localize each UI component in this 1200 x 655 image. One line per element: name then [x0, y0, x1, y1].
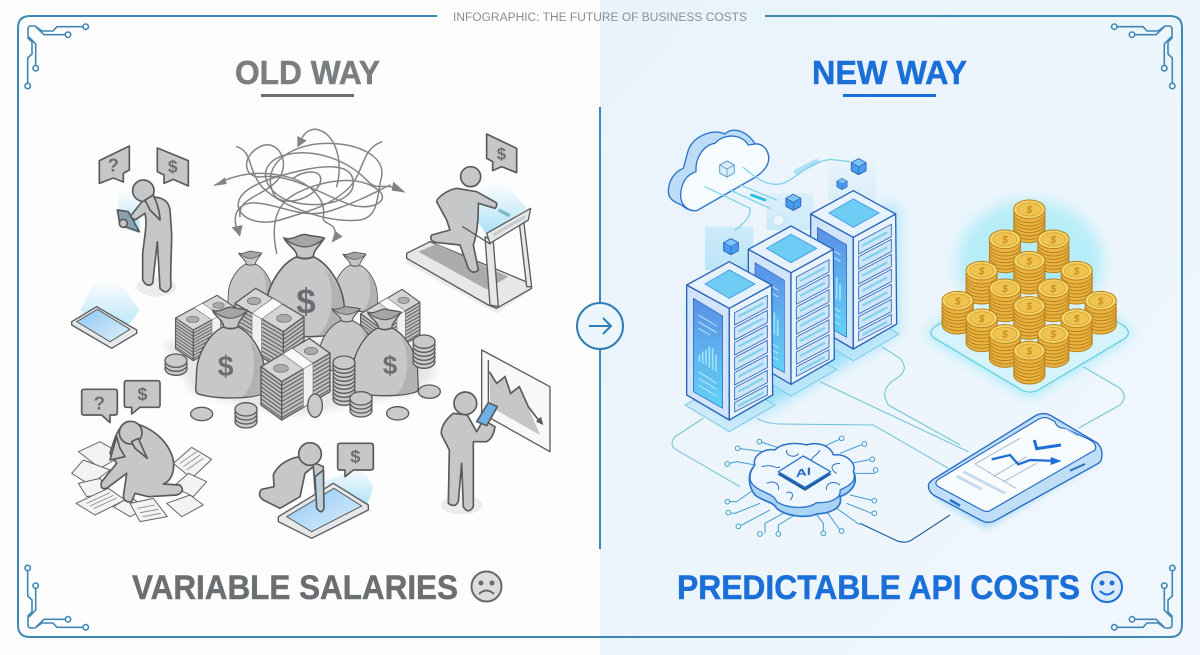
- connector lines: [672, 347, 1124, 487]
- big money bag: [265, 235, 345, 337]
- circuit traces: [725, 436, 878, 536]
- cash stack back-right: [361, 289, 420, 360]
- icon: scribble of tangled arrows: [215, 129, 403, 253]
- back-right money bag: [332, 252, 378, 312]
- icon: cloud: [668, 130, 769, 211]
- icon: smiling face: [1092, 572, 1122, 602]
- light beams: [705, 153, 877, 270]
- heading: old way: OLD WAY: [235, 54, 380, 91]
- coin dollar signs: $: [1026, 205, 1033, 216]
- caption: variable salaries: VARIABLE SALARIES: [132, 569, 458, 607]
- server tower front: [685, 262, 775, 432]
- AI brain chip: [725, 436, 878, 536]
- panel: old way illustration: [72, 129, 550, 538]
- background: old way panel: [0, 0, 600, 655]
- left front money bag: [196, 307, 266, 398]
- coin dollar signs: $: [1073, 314, 1080, 325]
- cash stack back-left: [176, 295, 235, 361]
- coin stacks: [165, 335, 440, 428]
- AI chip: [778, 456, 831, 490]
- coin dollar signs: $: [1050, 330, 1057, 341]
- speech bubble: question: [99, 146, 129, 183]
- right front money bag: $: [383, 350, 398, 380]
- speech bubble: dollar: [157, 148, 188, 186]
- front cash stack: [261, 338, 330, 420]
- phone chart: [975, 438, 1037, 488]
- right front money bag: [352, 309, 418, 396]
- brain: [749, 444, 855, 516]
- coin dollar signs: $: [978, 314, 985, 325]
- declining line chart: [482, 350, 550, 452]
- data flow arrows: [705, 159, 850, 230]
- coin dollar signs: $: [1026, 346, 1033, 357]
- coin dollar signs: $: [1026, 302, 1033, 313]
- big money bag: $: [296, 282, 316, 321]
- figure: person on treadmill: [407, 134, 532, 313]
- icon: sad face: [472, 572, 502, 602]
- coin dollar signs: [954, 205, 1104, 357]
- phone check mark: [1034, 440, 1061, 449]
- icon: tablet on desk: [72, 280, 140, 348]
- coin stacks: [942, 200, 1116, 384]
- coin dollar signs: $: [1026, 256, 1033, 267]
- panel: new way illustration: [668, 130, 1132, 542]
- arrow badge: [577, 303, 623, 349]
- coin dollar signs: $: [1073, 266, 1080, 277]
- glow behind servers: [690, 203, 897, 420]
- cash stack centre: [235, 288, 304, 370]
- papers: [72, 442, 212, 522]
- coin dollar signs: $: [1001, 330, 1008, 341]
- smartphone with rising chart: [928, 414, 1102, 528]
- coin dollar signs: $: [954, 296, 961, 307]
- speech bubble: dollar: $: [168, 157, 178, 177]
- figure: person kneeling over tablet: [260, 443, 373, 538]
- server tower middle: [747, 226, 837, 396]
- speech bubble: dollar: $: [350, 447, 360, 467]
- speech bubble: dollar: [487, 134, 517, 173]
- coin dollar signs: $: [1050, 235, 1057, 246]
- floating cubes: [724, 159, 866, 255]
- top caption: INFOGRAPHIC: THE FUTURE OF BUSINESS COSTS: [453, 12, 747, 24]
- back-left money bag: [228, 251, 274, 311]
- left front money bag: $: [218, 351, 234, 383]
- heading: new way: NEW WAY: [812, 54, 967, 91]
- background: new way panel: [600, 0, 1200, 655]
- coin pyramid on glowing plate: [927, 200, 1132, 395]
- speech bubble: dollar: $: [137, 384, 147, 404]
- figure: person pointing at declining chart: [441, 350, 550, 514]
- figure: person crouching among papers: [72, 381, 212, 522]
- coin dollar signs: $: [1050, 284, 1057, 295]
- icon: scribble arrow heads: [213, 136, 406, 243]
- coin dollar signs: $: [1001, 284, 1008, 295]
- caption: predictable api costs: PREDICTABLE API COSTS: [677, 569, 1080, 607]
- speech bubble: dollar: [124, 381, 160, 414]
- coin dollar signs: $: [1001, 235, 1008, 246]
- AI chip: AI: [796, 465, 811, 480]
- divider line: [599, 107, 601, 549]
- coin dollar signs: $: [1097, 296, 1104, 307]
- pile shadow: [163, 333, 437, 417]
- speech bubble: dollar: $: [497, 144, 507, 163]
- server tower back: [809, 191, 899, 361]
- mid money bag: [319, 307, 375, 371]
- speech bubble: question: ?: [94, 392, 105, 413]
- coin dollar signs: $: [978, 266, 985, 277]
- dark connector from phone: [860, 515, 950, 542]
- figure: person looking at tablet: [99, 146, 188, 297]
- money pile: [163, 235, 440, 428]
- speech bubble: question: ?: [108, 155, 119, 176]
- speech bubble: question: [82, 389, 117, 423]
